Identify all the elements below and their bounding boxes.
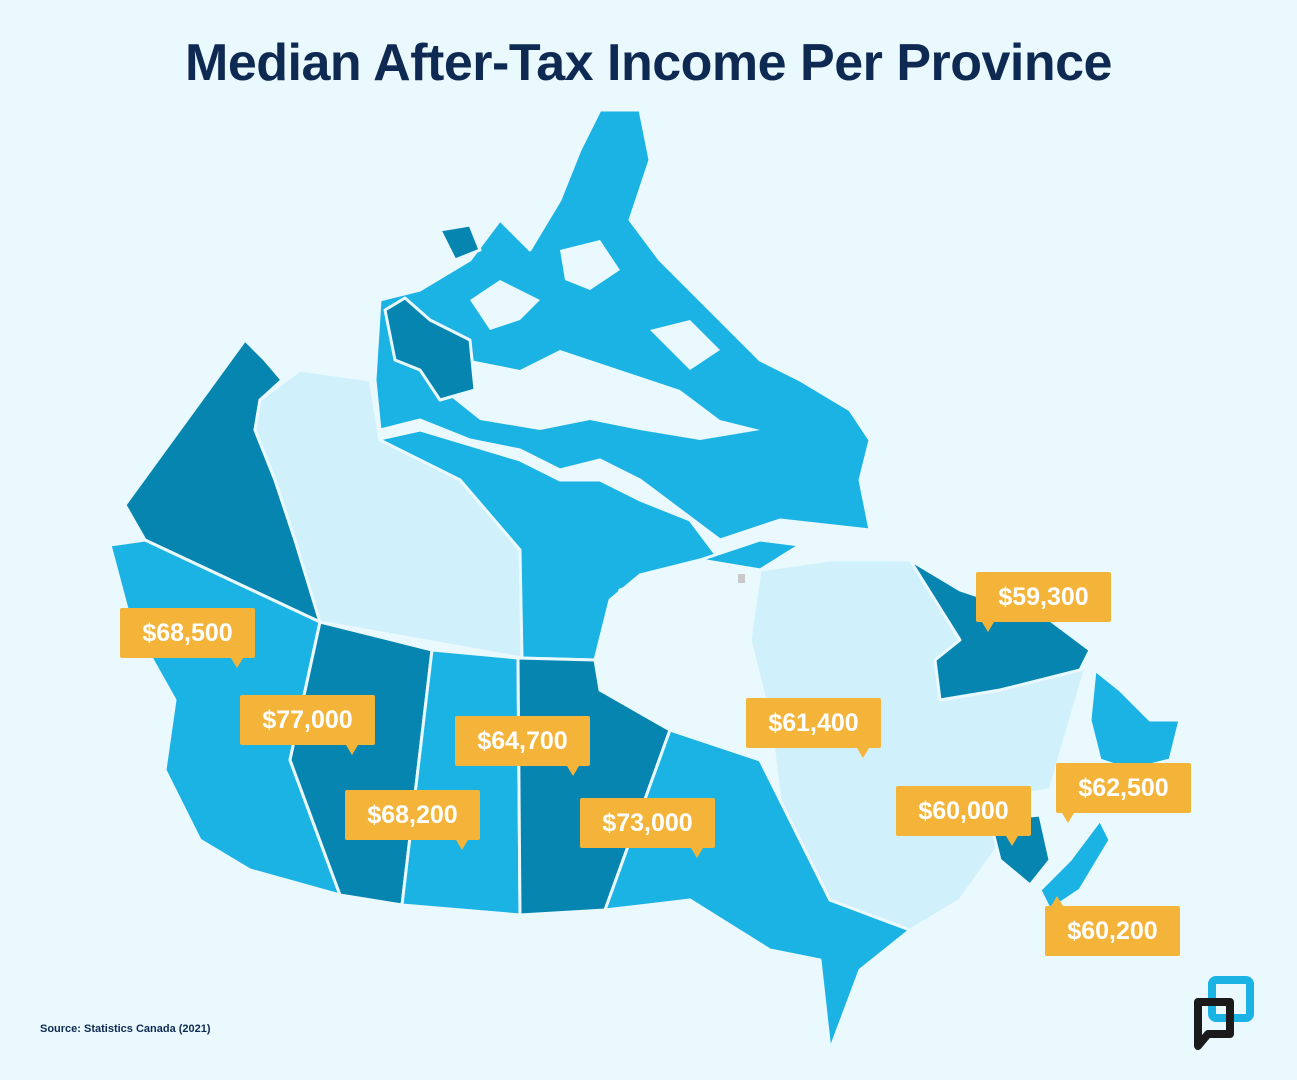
label: BC: $68,500 [142, 619, 233, 647]
quebec [750, 560, 1085, 930]
nunavut dark islands [385, 225, 480, 400]
label: PEI [1056, 763, 1191, 813]
small grey island [738, 574, 745, 583]
source: Source: Statistics Canada (2021) [40, 1023, 211, 1035]
label: Quebec [746, 698, 881, 748]
label: Manitoba: $64,700 [477, 727, 568, 755]
northwest territories [255, 370, 522, 658]
yukon [125, 340, 320, 622]
label: Saskatchewan [345, 790, 480, 840]
ontario [605, 730, 910, 1050]
label: Alberta: $77,000 [262, 706, 353, 734]
saskatchewan [402, 650, 520, 915]
nova scotia [1040, 820, 1110, 910]
label: New Brunswick [896, 786, 1031, 836]
newfoundland and labrador [910, 560, 1090, 700]
label: Manitoba [455, 716, 590, 766]
label: Ontario [580, 798, 715, 848]
nunavut arctic islands [375, 110, 870, 660]
alberta [290, 622, 432, 905]
water channels in archipelago [430, 240, 760, 440]
title: Median After-Tax Income Per Province [185, 34, 1112, 92]
label: New Brunswick: $60,000 [918, 797, 1009, 825]
label: PEI: $62,500 [1078, 774, 1169, 802]
new brunswick [990, 815, 1050, 885]
british columbia [110, 540, 340, 895]
hudson bay [600, 560, 770, 760]
label: Saskatchewan: $68,200 [367, 801, 458, 829]
label: Nova Scotia [1045, 906, 1180, 956]
label: Alberta [240, 695, 375, 745]
logo [1194, 976, 1254, 1050]
label: Ontario: $73,000 [602, 809, 693, 837]
label: Newfoundland [976, 572, 1111, 622]
label: Newfoundland: $59,300 [998, 583, 1089, 611]
manitoba [518, 658, 670, 915]
label: Nova Scotia: $60,200 [1067, 917, 1158, 945]
label: BC [120, 608, 255, 658]
label: Quebec: $61,400 [768, 709, 859, 737]
